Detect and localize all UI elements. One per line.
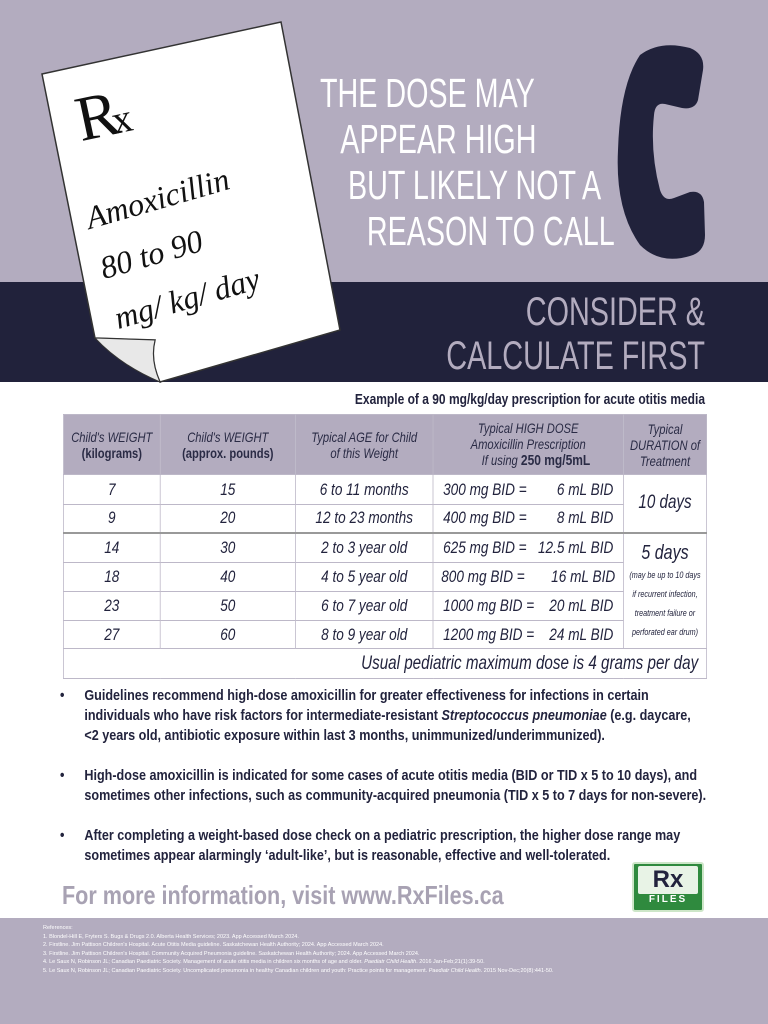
dosing table: 27 <box>104 624 119 644</box>
footer references: 3. Firstline. Jim Pattison Children's Hospital. Community Acquired Pneumonia guideline. Saskatchewan Health Authority; 2024. App Accessed March 2024. <box>43 950 419 956</box>
dosing table: DURATION of <box>630 436 700 452</box>
dosing table: 1200 mg BID = 24 mL BID <box>443 624 613 644</box>
dosing table: 18 <box>104 567 119 586</box>
footer references: 1. Blondel-Hill E, Fryters S. Bugs & Drugs 2.0. Alberta Health Services; 2023. App Accessed March 2024. <box>43 934 299 940</box>
handwritten text <box>82 161 264 336</box>
Rx symbol: Rx <box>69 77 136 155</box>
logo: RxFiles: FILES <box>649 894 687 905</box>
bullet points: <2 years old, antibiotic exposure within last 3 months, unimmunized/underimmunized). <box>84 727 605 744</box>
dosing table: 12 to 23 months <box>315 508 413 527</box>
dark band <box>0 282 768 382</box>
more info link: For more information, visit www.RxFiles.ca <box>62 880 504 910</box>
handwritten text: Amoxicillin <box>82 161 233 236</box>
dosing table: Treatment <box>640 452 690 468</box>
footer references: References: <box>43 925 73 931</box>
dosing table: Typical AGE for Child <box>311 428 417 444</box>
dosing table: 7 <box>108 480 116 498</box>
bullet points: individuals who have risk factors for intermediate-resistant Streptococcus pneumoniae (e.g. daycare, <box>84 707 691 724</box>
bullet points: High-dose amoxicillin is indicated for some cases of acute otitis media (BID or TID x 5 to 10 days), and <box>84 767 697 784</box>
dosing table: 6 to 7 year old <box>321 596 407 615</box>
dosing table: Typical <box>648 420 682 436</box>
bullet points: sometimes other infections, such as community-acquired pneumonia (TID x 5 to 7 days for non-severe). <box>84 787 706 804</box>
table caption: Example of a 90 mg/kg/day prescription for acute otitis media <box>355 391 705 408</box>
dosing table <box>63 414 707 679</box>
dosing table: treatment failure or <box>635 608 695 618</box>
icon: phone <box>618 45 705 259</box>
dosing table: 14 <box>104 538 119 557</box>
footer references <box>0 918 768 1024</box>
dosing table: 4 to 5 year old <box>321 567 407 586</box>
headline: REASON TO CALL <box>367 208 615 254</box>
dosing table: 15 <box>220 480 235 498</box>
dosing table: 1000 mg BID = 20 mL BID <box>443 596 613 615</box>
subheading: CONSIDER & <box>526 290 705 334</box>
dosing table: Typical HIGH DOSE <box>478 420 578 436</box>
bullet points: • <box>60 767 64 784</box>
bullet points: • <box>60 827 64 844</box>
dosing table: Amoxicillin Prescription <box>471 436 586 452</box>
dosing table: (approx. pounds) <box>182 444 274 460</box>
logo: RxFiles: Rx <box>653 866 683 893</box>
dosing table: 23 <box>104 596 119 615</box>
headline: THE DOSE MAY <box>320 70 535 116</box>
footer references: 5. Le Saux N, Robinson JL; Canadian Paediatric Society. Uncomplicated pneumonia in healthy Canadian children and youth: Practice points for management. Paediatr Child Health. 2015 Nov-Dec;20(8):441-50. <box>43 968 554 974</box>
footer references: 2. Firstline. Jim Pattison Children's Hospital. Acute Otitis Media guideline. Saskatchewan Health Authority; 2024. App Accessed March 2024. <box>43 942 384 948</box>
dosing table: if recurrent infection, <box>632 589 698 599</box>
dosing table: If using 250 mg/5mL <box>482 452 590 469</box>
logo: RxFiles <box>632 862 704 912</box>
headline: BUT LIKELY NOT A <box>348 162 601 208</box>
bullet points <box>60 687 706 864</box>
dosing table: 10 days <box>638 492 692 513</box>
dosing table: 50 <box>220 596 235 615</box>
dosing table: (may be up to 10 days <box>629 570 701 580</box>
top band <box>0 0 768 282</box>
subheading: CALCULATE FIRST <box>446 334 705 378</box>
bullet points: Guidelines recommend high-dose amoxicillin for greater effectiveness for infections in certain <box>84 687 649 704</box>
dosing table: 9 <box>108 508 116 527</box>
dosing table: 5 days <box>641 542 689 564</box>
headline <box>320 70 615 254</box>
dosing table: of this Weight <box>330 444 398 460</box>
dosing table: 6 to 11 months <box>320 480 409 498</box>
dosing table: 300 mg BID = 6 mL BID <box>443 480 613 498</box>
bullet points: • <box>60 687 64 704</box>
dosing table: 400 mg BID = 8 mL BID <box>443 508 613 527</box>
subheading <box>446 290 705 378</box>
handwritten text: 80 to 90 <box>96 222 207 286</box>
dosing table: 800 mg BID = 16 mL BID <box>441 567 615 586</box>
dosing table: Child's WEIGHT <box>71 428 152 444</box>
dosing table: 30 <box>220 538 235 557</box>
headline: APPEAR HIGH <box>340 116 536 162</box>
handwritten text: mg/ kg/ day <box>110 260 264 336</box>
dosing table: 40 <box>220 567 235 586</box>
dosing table: 8 to 9 year old <box>321 624 407 644</box>
dosing table: Usual pediatric maximum dose is 4 grams per day <box>361 652 698 674</box>
footer references: 4. Le Saux N, Robinson JL; Canadian Paediatric Society. Management of acute otitis media in children six months of age and older. Paediatr Child Health. 2016 Jan-Feb;21(1):39-50. <box>43 959 485 965</box>
bullet points: After completing a weight-based dose check on a pediatric prescription, the higher dose range may <box>84 827 680 844</box>
dosing table: Child's WEIGHT <box>187 428 268 444</box>
dosing table: 20 <box>220 508 235 527</box>
dosing table: perforated ear drum) <box>632 627 698 637</box>
dosing table: (kilograms) <box>82 444 142 460</box>
dosing table: 60 <box>220 624 235 644</box>
dosing table: 2 to 3 year old <box>321 538 407 557</box>
prescription paper <box>41 21 341 383</box>
bullet points: sometimes appear alarmingly ‘adult-like’, but is reasonable, effective and well-tolerated. <box>84 847 610 864</box>
dosing table: 625 mg BID = 12.5 mL BID <box>443 538 613 557</box>
